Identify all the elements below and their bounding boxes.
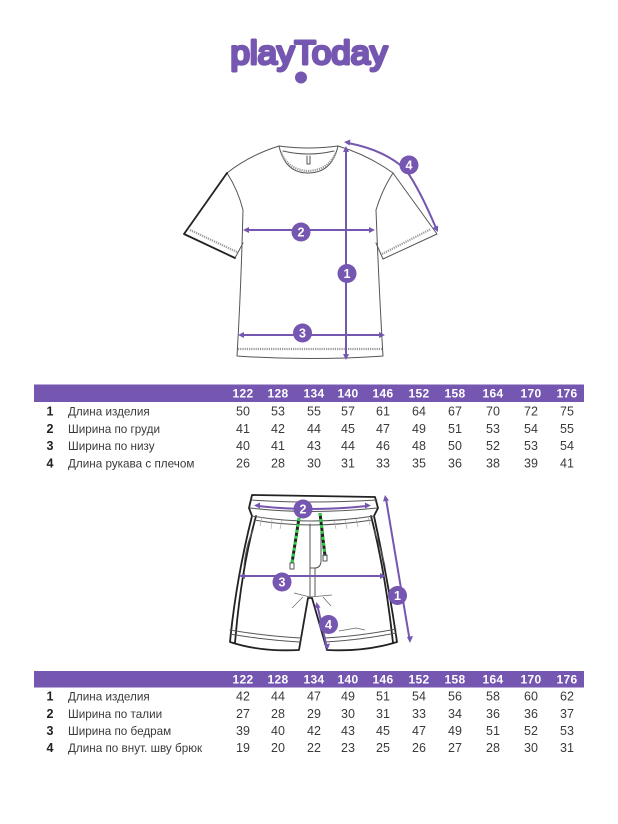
table rows: t-shirt measurements: 47: [376, 422, 390, 436]
table rows: t-shirt measurements: Ширина по груди: [68, 423, 160, 436]
table header bar: t-shirt: 152: [409, 386, 429, 400]
table rows: shorts measurements: 31: [376, 707, 390, 721]
table rows: shorts measurements: 29: [307, 707, 321, 721]
t-shirt outline: [184, 146, 437, 358]
measurement 1: garment length: 1: [344, 267, 351, 281]
measurement 1: shorts length: [383, 495, 413, 643]
table rows: t-shirt measurements: 44: [341, 439, 355, 453]
table rows: t-shirt measurements: 70: [486, 404, 500, 418]
table header bar: t-shirt: 134: [304, 386, 324, 400]
table header bar: shorts: 146: [373, 672, 393, 686]
table rows: shorts measurements: 22: [307, 741, 321, 755]
table rows: t-shirt measurements: 54: [524, 422, 538, 436]
table rows: shorts measurements: 49: [448, 724, 462, 738]
table rows: shorts measurements: 47: [307, 690, 321, 704]
table header bar: t-shirt: 128: [268, 386, 288, 400]
table header bar: shorts: 170: [521, 672, 541, 686]
table rows: t-shirt measurements: 40: [236, 439, 250, 453]
table rows: t-shirt measurements: 55: [560, 422, 574, 436]
table rows: shorts measurements: Ширина по бедрам: [68, 725, 171, 738]
table rows: t-shirt measurements: 50: [448, 439, 462, 453]
measurement 3: hip width: [239, 572, 386, 592]
table rows: t-shirt measurements: 3: [47, 439, 54, 453]
table rows: t-shirt measurements: 26: [236, 456, 250, 470]
table rows: t-shirt measurements: 55: [307, 404, 321, 418]
table header bar: t-shirt: 146: [373, 386, 393, 400]
table rows: shorts measurements: 56: [448, 690, 462, 704]
table rows: shorts measurements: 30: [524, 741, 538, 755]
table rows: shorts measurements: 54: [412, 690, 426, 704]
table rows: shorts measurements: 43: [341, 724, 355, 738]
table rows: shorts measurements: Ширина по талии: [68, 708, 162, 721]
table rows: t-shirt measurements: 53: [524, 439, 538, 453]
table rows: t-shirt measurements: 33: [376, 456, 390, 470]
table rows: t-shirt measurements: 31: [341, 456, 355, 470]
table rows: t-shirt measurements: 43: [307, 439, 321, 453]
table header bar: t-shirt: 176: [557, 386, 577, 400]
table rows: t-shirt measurements: 30: [307, 456, 321, 470]
table rows: shorts measurements: 30: [341, 707, 355, 721]
table header bar: t-shirt: 122: [233, 386, 253, 400]
table rows: t-shirt measurements: 61: [376, 404, 390, 418]
table rows: shorts measurements: 53: [560, 724, 574, 738]
table rows: shorts measurements: 52: [524, 724, 538, 738]
table rows: t-shirt measurements: 54: [560, 439, 574, 453]
measurement 3: hip width: 3: [279, 576, 286, 590]
table rows: shorts measurements: 42: [307, 724, 321, 738]
measurement 4: inseam length: 4: [325, 618, 332, 632]
measurement 2: waist width: 2: [300, 502, 307, 516]
table rows: shorts measurements: 27: [236, 707, 250, 721]
table rows: t-shirt measurements: 53: [486, 422, 500, 436]
table rows: shorts measurements: 20: [271, 741, 285, 755]
table rows: t-shirt measurements: 41: [236, 422, 250, 436]
table rows: shorts measurements: 1: [47, 690, 54, 704]
table rows: t-shirt measurements: 51: [448, 422, 462, 436]
table rows: shorts measurements: 25: [376, 741, 390, 755]
table header bar: t-shirt: 170: [521, 386, 541, 400]
table header bar: shorts: 158: [445, 672, 465, 686]
table rows: t-shirt measurements: 36: [448, 456, 462, 470]
table header bar: shorts: 164: [483, 672, 503, 686]
table rows: t-shirt measurements: 72: [524, 404, 538, 418]
measurement 4: sleeve length: 4: [406, 158, 413, 172]
table header bar: shorts: 152: [409, 672, 429, 686]
table header bar: t-shirt: 164: [483, 386, 503, 400]
table rows: shorts measurements: 23: [341, 741, 355, 755]
table rows: t-shirt measurements: 45: [341, 422, 355, 436]
table rows: t-shirt measurements: Длина рукава с плечом: [68, 458, 194, 470]
table rows: t-shirt measurements: 1: [47, 404, 54, 418]
table rows: shorts measurements: 58: [486, 690, 500, 704]
table rows: shorts measurements: 26: [412, 741, 426, 755]
table rows: shorts measurements: 47: [412, 724, 426, 738]
table rows: t-shirt measurements: 28: [271, 456, 285, 470]
table header bar: shorts: 128: [268, 672, 288, 686]
table rows: t-shirt measurements: Длина изделия: [68, 406, 150, 418]
table rows: t-shirt measurements: 46: [376, 439, 390, 453]
table rows: shorts measurements: 60: [524, 690, 538, 704]
table rows: t-shirt measurements: [47, 404, 574, 470]
table rows: shorts measurements: 45: [376, 724, 390, 738]
table rows: t-shirt measurements: 41: [271, 439, 285, 453]
table rows: shorts measurements: 44: [271, 690, 285, 704]
table header bar: shorts: 140: [338, 672, 358, 686]
table rows: t-shirt measurements: 49: [412, 422, 426, 436]
table rows: t-shirt measurements: 4: [47, 456, 54, 470]
table rows: shorts measurements: 34: [448, 707, 462, 721]
table rows: shorts measurements: 51: [376, 690, 390, 704]
illustration: t-shirt with measurements: [184, 140, 438, 360]
table rows: t-shirt measurements: 67: [448, 404, 462, 418]
table header bar: t-shirt: [34, 384, 584, 402]
table rows: shorts measurements: 51: [486, 724, 500, 738]
table rows: shorts measurements: Длина по внут. шву брюк: [68, 742, 203, 755]
table header bar: shorts: 134: [304, 672, 324, 686]
table rows: shorts measurements: [47, 690, 574, 755]
table rows: shorts measurements: 36: [486, 707, 500, 721]
table rows: shorts measurements: 62: [560, 690, 574, 704]
table rows: t-shirt measurements: 57: [341, 404, 355, 418]
table rows: t-shirt measurements: 52: [486, 439, 500, 453]
table rows: t-shirt measurements: 44: [307, 422, 321, 436]
table rows: t-shirt measurements: 53: [271, 404, 285, 418]
table rows: t-shirt measurements: 39: [524, 456, 538, 470]
table rows: shorts measurements: 3: [47, 724, 54, 738]
table rows: t-shirt measurements: 35: [412, 456, 426, 470]
table header bar: shorts: 122: [233, 672, 253, 686]
table rows: t-shirt measurements: 64: [412, 404, 426, 418]
measurement 2: chest width: 2: [298, 226, 305, 240]
shorts outline: [230, 495, 397, 650]
table header bar: shorts: 176: [557, 672, 577, 686]
table header bar: t-shirt: 158: [445, 386, 465, 400]
table rows: shorts measurements: Длина изделия: [68, 690, 150, 704]
table rows: t-shirt measurements: 50: [236, 404, 250, 418]
table header bar: t-shirt: 140: [338, 386, 358, 400]
table rows: shorts measurements: 27: [448, 741, 462, 755]
measurement 4: sleeve length: [344, 140, 438, 232]
measurement 4: inseam length: [314, 602, 338, 650]
table rows: t-shirt measurements: 42: [271, 422, 285, 436]
table rows: t-shirt measurements: 75: [560, 404, 574, 418]
table rows: shorts measurements: 42: [236, 690, 250, 704]
measurement 1: shorts length: 1: [394, 589, 401, 603]
table rows: shorts measurements: 4: [47, 741, 54, 755]
table rows: shorts measurements: 33: [412, 707, 426, 721]
table rows: shorts measurements: 28: [486, 741, 500, 755]
table rows: t-shirt measurements: Ширина по низу: [68, 440, 155, 453]
measurement 2: waist width: [254, 500, 371, 518]
table rows: t-shirt measurements: 41: [560, 456, 574, 470]
logo: playToday: playToday: [230, 34, 388, 71]
table header bar: shorts: [34, 671, 584, 688]
table rows: shorts measurements: 19: [236, 741, 250, 755]
measurement 3: hem width: 3: [299, 326, 306, 340]
table rows: shorts measurements: 39: [236, 724, 250, 738]
table rows: shorts measurements: 37: [560, 707, 574, 721]
table rows: t-shirt measurements: 38: [486, 456, 500, 470]
table rows: shorts measurements: 31: [560, 741, 574, 755]
table rows: t-shirt measurements: 48: [412, 439, 426, 453]
table rows: shorts measurements: 49: [341, 690, 355, 704]
measurement 2: chest width: [243, 222, 375, 242]
measurement 3: hem width: [238, 324, 385, 342]
table rows: t-shirt measurements: 2: [47, 422, 54, 436]
illustration: shorts with measurements: [230, 495, 413, 650]
table rows: shorts measurements: 40: [271, 724, 285, 738]
table rows: shorts measurements: 36: [524, 707, 538, 721]
measurement 1: garment length: [338, 146, 356, 360]
table rows: shorts measurements: 28: [271, 707, 285, 721]
table rows: shorts measurements: 2: [47, 707, 54, 721]
